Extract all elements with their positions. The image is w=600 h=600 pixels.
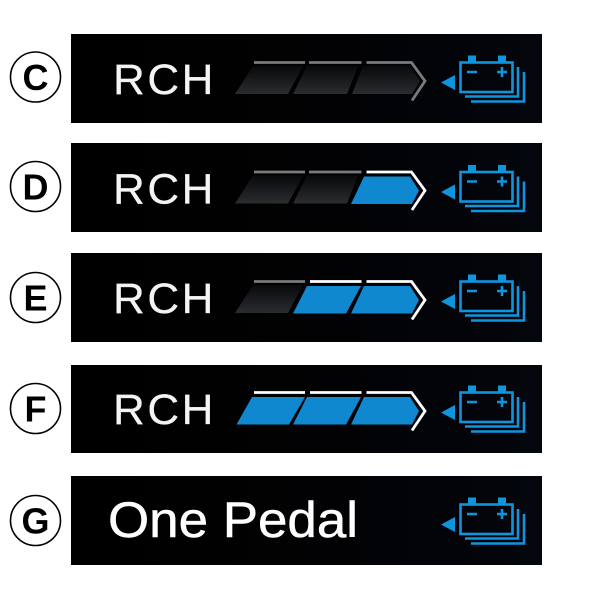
icon: battery indicator: [441, 386, 524, 432]
regen level bar: 1 of 3: [235, 172, 425, 210]
badge C: C: [22, 57, 48, 98]
label RCH: RCH: [113, 166, 216, 214]
badge E: E: [23, 278, 48, 318]
icon: battery indicator: [441, 165, 524, 211]
badge G: [10, 496, 60, 546]
row F: [10, 365, 542, 453]
row G: [10, 476, 542, 565]
display panel G: [71, 476, 542, 565]
badge G: G: [21, 500, 50, 542]
badge E: [10, 272, 60, 322]
label RCH: RCH: [113, 56, 216, 104]
display panel F: [71, 365, 542, 453]
row E: [10, 253, 542, 342]
label RCH: RCH: [113, 386, 216, 434]
badge C: [10, 52, 60, 102]
badge F: F: [24, 388, 46, 430]
icon: battery indicator: [441, 274, 524, 320]
label One Pedal: One Pedal: [108, 492, 358, 548]
icon: battery indicator: [441, 498, 524, 544]
regen level bar: 0 of 3: [235, 62, 425, 100]
badge D: D: [22, 166, 48, 208]
label RCH: RCH: [113, 275, 216, 323]
badge D: [10, 162, 60, 212]
display panel C: [71, 34, 542, 123]
display panel E: [71, 253, 542, 342]
regen level bar: 3 of 3: [236, 392, 425, 430]
row C: [10, 34, 542, 123]
row D: [10, 143, 542, 232]
display panel D: [71, 143, 542, 232]
icon: battery indicator: [441, 56, 524, 102]
badge F: [10, 384, 60, 434]
regen level bar: 2 of 3: [235, 282, 425, 320]
